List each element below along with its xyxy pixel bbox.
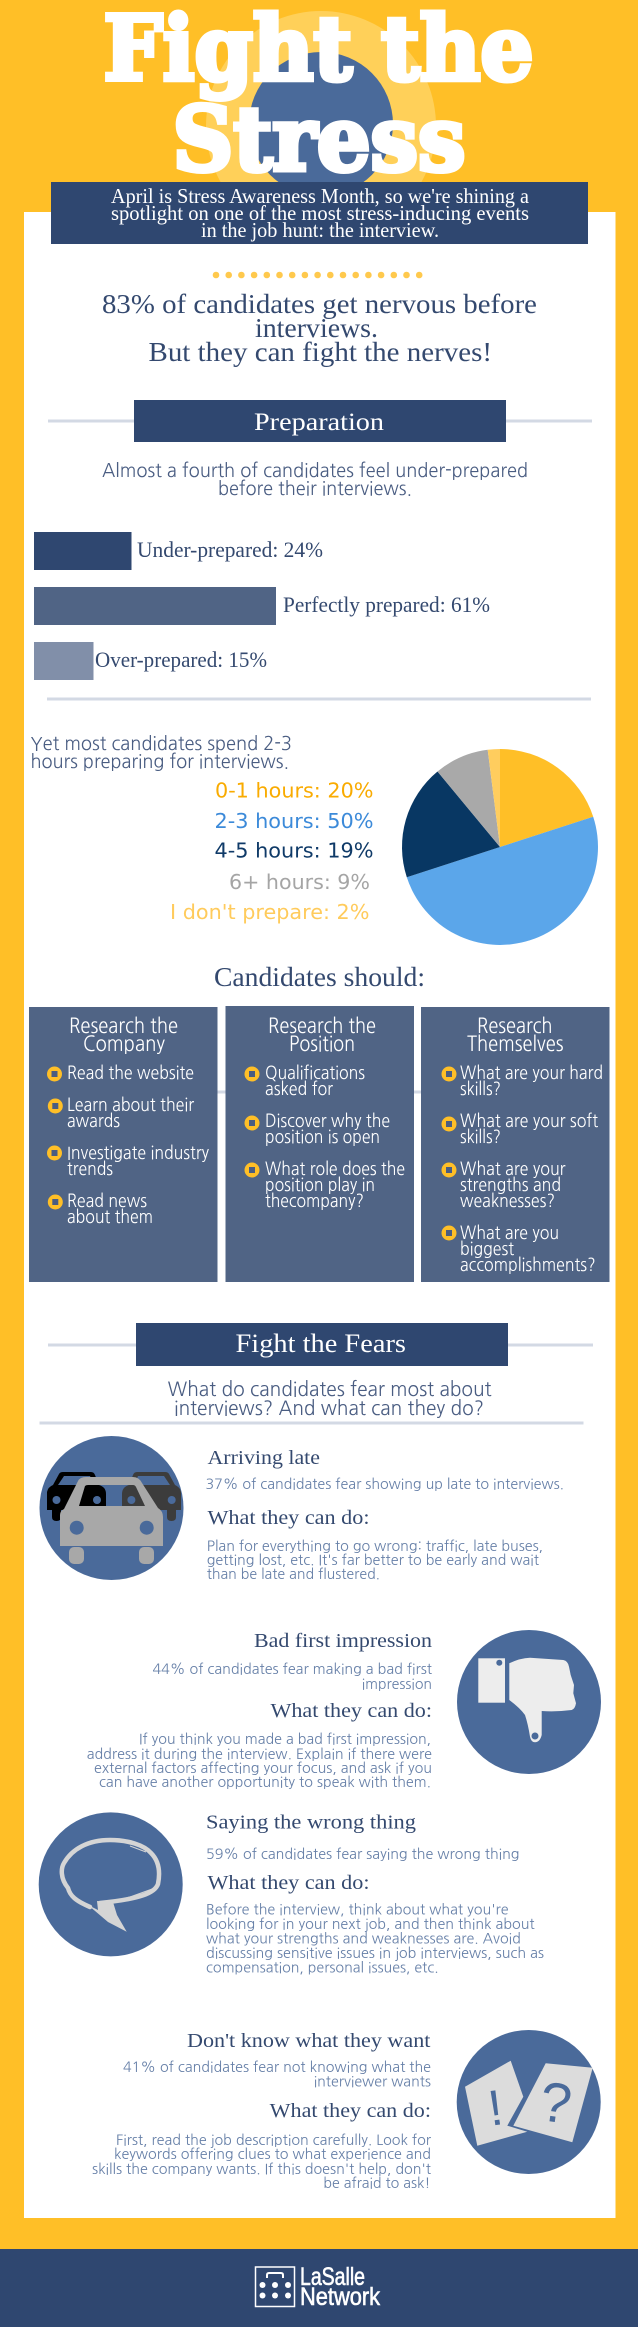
bullet <box>48 1194 63 1210</box>
icon: question papers: ? <box>536 2069 576 2136</box>
text: arriving late <box>206 1447 564 1582</box>
bullet <box>244 1162 260 1178</box>
text: arriving late: than be late and flustered. <box>207 1567 380 1582</box>
bullet <box>47 1066 62 1082</box>
text: saying the wrong thing: what your strengths and weaknesses are. Avoid <box>206 1932 521 1946</box>
icon: speech bubble <box>39 1812 183 1956</box>
text: bad first impression: external factors affecting your focus, and ask if you <box>94 1761 432 1776</box>
text: bad first impression: address it during the interview. Explain if there were <box>87 1747 432 1762</box>
panel: research the company: Read news <box>67 1192 147 1210</box>
text: saying the wrong thing: 59% of candidates fear saying the wrong thing <box>206 1847 520 1862</box>
panel: research themselves: strengths and <box>460 1176 561 1194</box>
logo: LaSalle Network: LaSalle <box>300 2263 365 2291</box>
preparation intro text: Almost a fourth of candidates feel under-prepared <box>102 461 528 480</box>
icon: question papers: ! <box>485 2079 506 2137</box>
panel: research themselves: Themselves <box>467 1034 564 1055</box>
dark grey car <box>122 1472 181 1521</box>
text: don't know what they want: 41% of candidates fear not knowing what the <box>123 2060 431 2075</box>
panel: research the company: trends <box>67 1160 113 1178</box>
icon: question papers <box>457 2030 601 2174</box>
panel: research themselves: What are your soft <box>460 1112 599 1130</box>
panel: research the company: Investigate industry <box>67 1144 209 1162</box>
text: don't know what they want: What they can do: <box>270 2100 431 2122</box>
pie chart <box>402 749 598 945</box>
text: bad first impression: 44% of candidates fear making a bad first <box>152 1662 433 1677</box>
section heading: preparation: Preparation <box>254 407 384 436</box>
fears intro text: interviews? And what can they do? <box>174 1398 484 1418</box>
bullet <box>442 1116 456 1132</box>
panel: research the company: Learn about their <box>67 1096 195 1114</box>
panel: research the position <box>226 1006 414 1282</box>
white content panel <box>24 212 616 2218</box>
panel: research the position: Qualifications <box>265 1064 365 1082</box>
headline statistic: But they can fight the nerves! <box>148 337 492 367</box>
panel: research the position: Position <box>289 1034 355 1055</box>
panel: research the position: thecompany? <box>265 1192 364 1210</box>
text: don't know what they want: be afraid to ask! <box>323 2176 430 2191</box>
panel: research themselves: What are your <box>460 1160 566 1178</box>
panel: research the position: position play in <box>265 1176 375 1194</box>
icon: cars <box>40 1436 184 1580</box>
preparation intro text <box>102 461 528 498</box>
panel: research themselves: weaknesses? <box>460 1192 555 1210</box>
text: don't know what they want: Don't know what they want <box>187 2030 431 2052</box>
preparation time text <box>30 734 292 771</box>
text: bad first impression: If you think you made a bad first impression, <box>139 1732 431 1747</box>
text: bad first impression: What they can do: <box>270 1700 432 1722</box>
bullet <box>244 1116 260 1130</box>
bar: under-prepared: Under-prepared: 24% <box>137 537 323 562</box>
panel: research themselves: Research <box>477 1016 552 1037</box>
text: bad first impression: impression <box>362 1678 432 1692</box>
black car <box>47 1472 106 1521</box>
pie legend: 6+ hours: 9% <box>229 870 370 894</box>
text: don't know what they want: interviewer wants <box>314 2076 431 2090</box>
icon: thumbs down <box>457 1630 601 1774</box>
bar chart <box>34 532 490 680</box>
preparation time text: Yet most candidates spend 2-3 <box>30 734 292 753</box>
bar: perfectly prepared: Perfectly prepared: 61% <box>283 592 490 617</box>
text: saying the wrong thing: Before the interview, think about what you're <box>206 1903 509 1918</box>
panel: research themselves: skills? <box>460 1128 501 1146</box>
section heading: fight the fears <box>48 1323 593 1366</box>
panel: research themselves: What are you <box>460 1224 559 1242</box>
text: don't know what they want: First, read the job description carefully. Look for <box>116 2133 432 2148</box>
text: arriving late: getting lost, etc. It's far better to be early and wait <box>207 1553 540 1568</box>
text: arriving late: What they can do: <box>208 1507 370 1529</box>
logo: LaSalle Network <box>256 2263 380 2311</box>
text: saying the wrong thing: What they can do: <box>208 1872 370 1894</box>
section heading: preparation <box>48 400 592 442</box>
logo: LaSalle Network: Network <box>300 2283 380 2311</box>
text: saying the wrong thing <box>206 1812 544 1975</box>
panel: research the company: Research the <box>69 1016 178 1037</box>
panel: research themselves: skills? <box>460 1080 501 1098</box>
title <box>104 0 534 191</box>
bar: perfectly prepared <box>34 587 490 625</box>
panel: research the company: awards <box>67 1112 120 1130</box>
intro banner: spotlight on one of the most stress-inducing events <box>111 201 529 225</box>
bullet <box>442 1162 456 1178</box>
candidates should heading: Candidates should: <box>214 961 425 992</box>
pie legend: 4-5 hours: 19% <box>214 838 374 862</box>
section heading: fight the fears: Fight the Fears <box>236 1328 406 1358</box>
preparation intro text: before their interviews. <box>218 479 412 498</box>
bullet <box>442 1226 456 1240</box>
pie legend: I don't prepare: 2% <box>170 900 370 924</box>
panel: research the position: Research the <box>268 1016 376 1037</box>
panel: research themselves: biggest <box>460 1240 515 1258</box>
text: saying the wrong thing: discussing sensitive issues in job interviews, such as <box>206 1946 544 1961</box>
text: arriving late: Plan for everything to go wrong: traffic, late buses, <box>207 1539 543 1554</box>
intro banner <box>51 182 588 244</box>
text: arriving late: 37% of candidates fear showing up late to interviews. <box>206 1477 564 1492</box>
panel: research themselves: What are your hard <box>460 1064 603 1082</box>
panel: research the company <box>29 1007 218 1282</box>
text: bad first impression: can have another opportunity to speak with them. <box>99 1775 431 1790</box>
intro banner: in the job hunt: the interview. <box>201 218 439 242</box>
headline statistic <box>102 289 537 367</box>
text: don't know what they want: keywords offering clues to what experience and <box>114 2147 431 2162</box>
text: saying the wrong thing: compensation, personal issues, etc. <box>206 1960 439 1975</box>
panel: research the position: position is open <box>265 1128 380 1146</box>
panel: research the company: Company <box>83 1034 165 1055</box>
bar: over-prepared: Over-prepared: 15% <box>95 647 267 672</box>
bullet <box>48 1098 63 1114</box>
footer <box>0 2249 638 2327</box>
text: don't know what they want <box>92 2030 432 2191</box>
intro banner: April is Stress Awareness Month, so we're shining a <box>111 184 530 208</box>
headline statistic: 83% of candidates get nervous before <box>102 289 537 319</box>
fears intro text: What do candidates fear most about <box>168 1379 492 1399</box>
pie legend: 0-1 hours: 20% <box>215 778 374 802</box>
bar: under-prepared <box>34 532 323 570</box>
panel: research the position: asked for <box>265 1080 334 1098</box>
panel: research themselves <box>421 1007 610 1282</box>
panel: research the company: Read the website <box>67 1064 194 1082</box>
headline statistic: interviews. <box>255 313 378 343</box>
bullet <box>244 1066 260 1082</box>
panel: research the position: What role does the <box>265 1160 405 1178</box>
text: saying the wrong thing: Saying the wrong thing <box>206 1812 416 1834</box>
panel: research the company: about them <box>67 1208 153 1226</box>
preparation time text: hours preparing for interviews. <box>30 752 289 771</box>
panel: research themselves: accomplishments? <box>460 1256 596 1274</box>
text: bad first impression: Bad first impression <box>254 1630 432 1652</box>
text: arriving late: Arriving late <box>208 1447 320 1469</box>
grey car <box>60 1477 163 1564</box>
fears intro text <box>168 1379 492 1418</box>
text: saying the wrong thing: looking for in your next job, and then think about <box>206 1917 535 1932</box>
title: Stress <box>172 86 466 191</box>
pie legend <box>170 778 374 924</box>
bullet <box>47 1146 62 1160</box>
text: don't know what they want: skills the company wants. If this doesn't help, don't <box>92 2162 432 2177</box>
header circles <box>206 11 436 241</box>
text: bad first impression <box>87 1630 433 1790</box>
pie legend: 2-3 hours: 50% <box>214 809 374 833</box>
bar: over-prepared <box>34 642 267 680</box>
panel: research the position: Discover why the <box>265 1112 390 1130</box>
bullet <box>442 1066 456 1082</box>
dotted divider <box>213 272 423 278</box>
